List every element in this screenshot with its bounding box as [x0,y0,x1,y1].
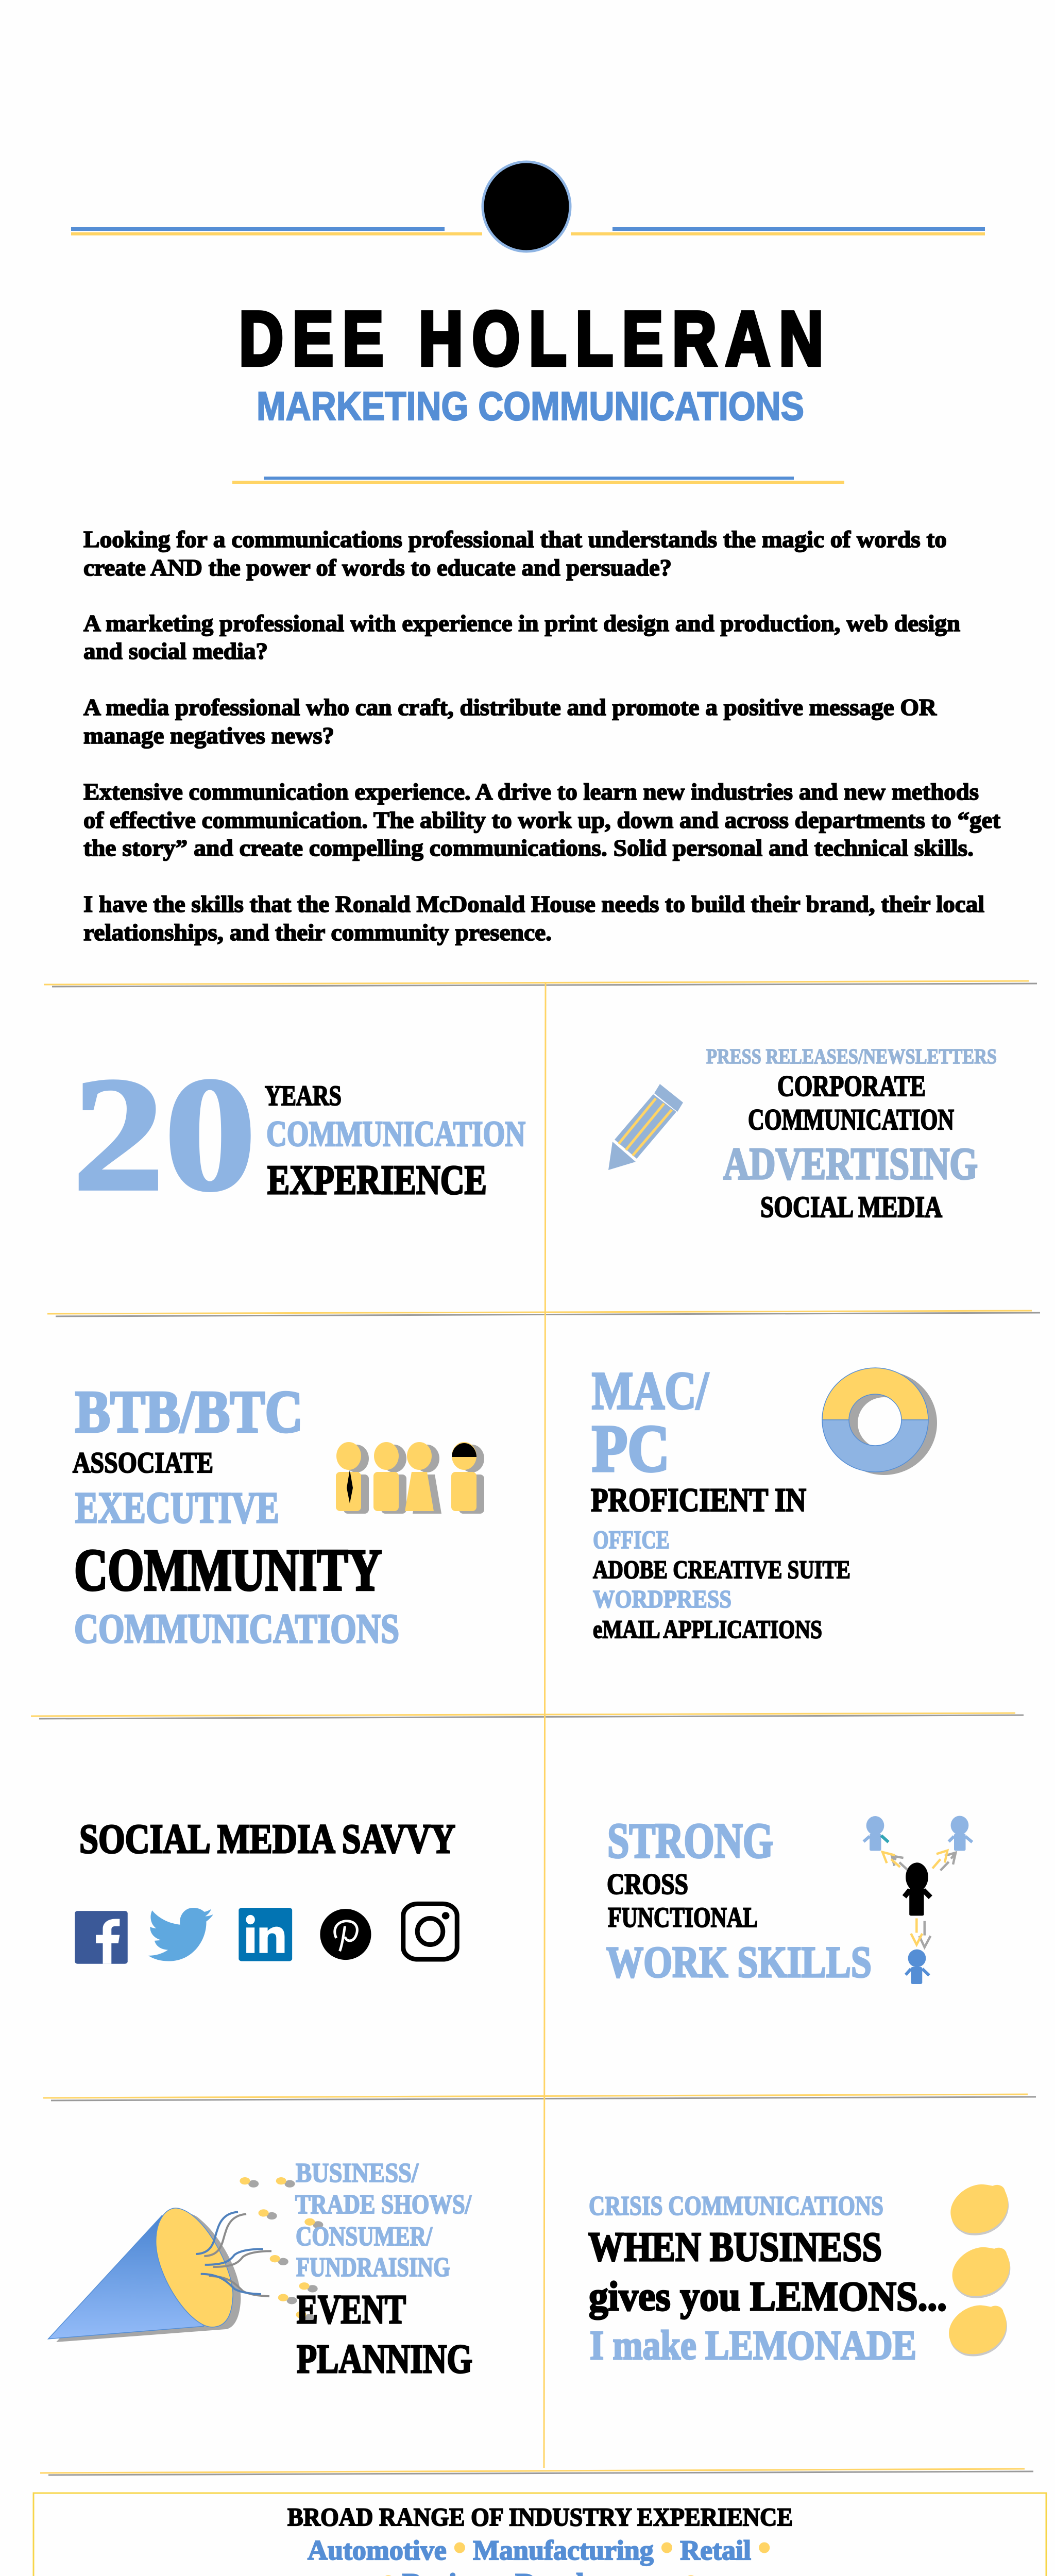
label: functional: FUNCTIONAL [608,1902,758,1933]
label: when business: WHEN BUSINESS [588,2225,882,2270]
panel: crisis communications [588,2184,1010,2368]
label: social media: SOCIAL MEDIA [760,1190,942,1224]
panel: technical proficiency [591,1361,937,1643]
icon: ring chart [822,1368,937,1475]
panel: writing skills [608,1044,997,1224]
grid rules [31,981,1040,2475]
label: I make lemonade: I make LEMONADE [590,2323,916,2368]
label: communication: COMMUNICATION [748,1104,954,1136]
label: email applications: eMAIL APPLICATIONS [593,1615,822,1643]
industry list line 1: Automotive • Manufacturing • Retail • [308,2528,771,2568]
label: proficient in: PROFICIENT IN [591,1482,806,1519]
intro text block: A media professional who can craft, distribute and promote a positive message OR [83,694,937,720]
icon: linkedin [239,1908,292,1961]
icon: twitter [148,1908,213,1961]
icon: facebook [75,1911,128,1964]
icon: instagram [403,1904,457,1959]
intro text block: Looking for a communications professional that understands the magic of words to [83,526,947,552]
label: press releases: PRESS RELEASES/NEWSLETTERS [706,1044,997,1068]
label: PC: PC [592,1412,670,1486]
icon: network of people with arrows [863,1816,972,1984]
subtitle: MARKETING COMMUNICATIONS [257,383,804,429]
icon: party popper [48,2177,323,2342]
label: years: YEARS [265,1080,342,1111]
label: fundraising: FUNDRAISING [296,2252,450,2282]
intro text block: Extensive communication experience. A drive to learn new industries and new methods [83,778,979,805]
label: executive: EXECUTIVE [75,1483,279,1532]
intro text block: manage negatives news? [83,722,334,749]
icon: three lemons [949,2184,1010,2356]
label: community: COMMUNITY [74,1537,382,1603]
label: communication: COMMUNICATION [266,1114,525,1154]
title: DEE HOLLERAN [239,296,832,381]
label: advertising: ADVERTISING [723,1139,978,1189]
icon: portrait circle [483,162,570,251]
heading: broad range of industry experience: BROAD RANGE OF INDUSTRY EXPERIENCE [287,2502,793,2531]
label: trade shows: TRADE SHOWS/ [295,2190,472,2219]
icon: four people [336,1442,484,1514]
intro text block: A marketing professional with experience in print design and production, web design [83,610,960,636]
label: planning: PLANNING [297,2337,472,2382]
intro text block: and social media? [83,638,268,664]
panel: social media [75,1817,457,1964]
label: corporate: CORPORATE [777,1070,926,1103]
label: office: OFFICE [593,1525,670,1554]
label: consumer: CONSUMER/ [296,2222,433,2251]
intro text block: the story” and create compelling communications. Solid personal and technical skills. [83,835,974,861]
label: crisis communications: CRISIS COMMUNICATIONS [589,2191,883,2221]
label: BTB/BTC: BTB/BTC [75,1379,303,1445]
label: adobe creative suite: ADOBE CREATIVE SUITE [593,1555,850,1584]
panel: event planning [48,2158,472,2382]
label: event: EVENT [297,2287,406,2332]
label: strong: STRONG [607,1813,773,1868]
icon: pencil [608,1084,683,1170]
panel: cross functional work skills [606,1813,972,1987]
label: gives you lemons: gives you LEMONS... [589,2274,947,2319]
big number 20: 20 [73,1044,256,1225]
intro text block: relationships, and their community presence. [83,919,552,945]
label: work skills: WORK SKILLS [606,1937,872,1987]
heading: social media savvy: SOCIAL MEDIA SAVVY [79,1817,455,1862]
intro text block: create AND the power of words to educate and persuade? [83,554,672,581]
panel: 20 years experience [73,1044,525,1225]
icon: pinterest [320,1909,371,1960]
label: MAC/: MAC/ [592,1361,709,1420]
label: cross: CROSS [607,1868,688,1901]
label: wordpress: WORDPRESS [593,1585,731,1613]
header underline [232,477,844,484]
intro text block: I have the skills that the Ronald McDonald House needs to build their brand, their local [83,891,984,917]
label: associate: ASSOCIATE [73,1447,213,1479]
panel: industry experience [33,2493,1046,2576]
label: business: BUSINESS/ [296,2158,419,2188]
panel: community communications [73,1379,484,1652]
label: communications: COMMUNICATIONS [74,1606,399,1652]
label: experience: EXPERIENCE [267,1158,487,1203]
header divider with portrait circle [71,162,985,251]
intro text block: of effective communication. The ability to work up, down and across departments to “get [83,807,1001,833]
intro text block [83,526,1001,945]
